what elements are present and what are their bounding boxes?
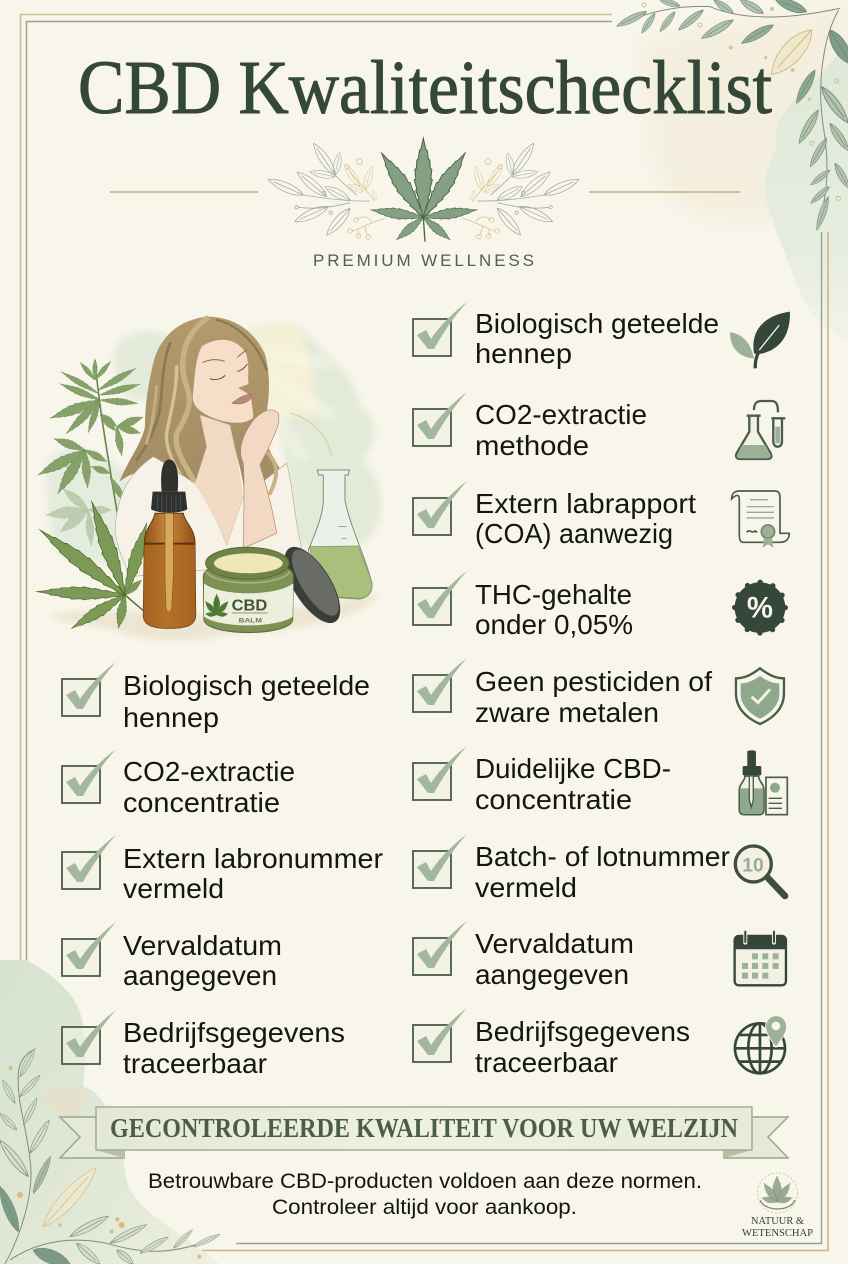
item: Geen pesticiden of zware metalen: Geen pesticiden of: [475, 666, 712, 697]
item: Biologisch geteelde hennep: Biologisch geteelde: [475, 308, 719, 339]
icon: percent badge: [735, 582, 785, 633]
cannabis plant: [35, 358, 145, 547]
item: Vervaldatum aangegeven: [413, 921, 634, 990]
item: Geen pesticiden of zware metalen: zware metalen: [475, 697, 659, 728]
blouse: [115, 457, 302, 577]
item: Extern labrapport (COA) aanwezig: [413, 481, 696, 549]
item: Vervaldatum aangegeven: [62, 922, 282, 991]
item: THC-gehalte onder 0,05%: THC-gehalte: [475, 579, 632, 610]
woman's hair, back: [119, 317, 282, 513]
icon: sprout: [730, 312, 790, 368]
item: THC-gehalte onder 0,05%: [413, 571, 633, 640]
item: Duidelijke CBD-concentratie: [413, 746, 671, 815]
item: CO2-extractie methode: methode: [475, 430, 589, 461]
amber dropper bottle: [143, 459, 196, 628]
icon: calendar: [735, 932, 786, 985]
item: Extern labrapport (COA) aanwezig: (COA) aanwezig: [475, 518, 673, 549]
item: Batch- of lotnummer vermeld: vermeld: [475, 872, 577, 903]
item: Biologisch geteelde hennep: hennep: [475, 338, 572, 369]
watercolor background: [47, 322, 381, 641]
checklist: left column: [62, 662, 383, 1079]
item: Batch- of lotnummer vermeld: [413, 834, 730, 903]
ornament: divider right: [589, 191, 740, 193]
ribbon banner: GECONTROLEERDE KWALITEIT VOOR UW WELZIJN: [110, 1113, 738, 1143]
item: Bedrijfsgegevens traceerbaar: [413, 1008, 690, 1078]
brand logo: Natuur & Wetenschap: WETENSCHAP: [742, 1228, 813, 1239]
CBD balm jar: CBD: [232, 598, 267, 615]
item: THC-gehalte onder 0,05%: onder 0,05%: [475, 609, 633, 640]
watercolor wash: top right: [640, 0, 848, 340]
item: Bedrijfsgegevens traceerbaar: Bedrijfsgegevens: [123, 1017, 345, 1048]
item: Duidelijke CBD-concentratie: Duidelijke CBD-: [475, 753, 671, 784]
ribbon banner: [60, 1107, 788, 1158]
CBD balm jar: [203, 547, 293, 632]
closing note: [148, 1170, 702, 1219]
arm and hand: [241, 410, 279, 548]
corner botanical: top right: [615, 0, 848, 231]
icon: dropper bottle and label card: [739, 750, 787, 815]
item: Vervaldatum aangegeven: aangegeven: [123, 960, 277, 991]
item: Biologisch geteelde hennep: hennep: [123, 702, 219, 733]
item: CO2-extractie concentratie: CO2-extractie: [123, 756, 295, 787]
item: Vervaldatum aangegeven: Vervaldatum: [123, 930, 282, 961]
neck and chest: [195, 415, 243, 545]
ornament: divider left: [110, 191, 258, 193]
title: CBD Kwaliteitschecklist: [78, 46, 772, 130]
left sprig: [266, 141, 385, 239]
item: Bedrijfsgegevens traceerbaar: traceerbaar: [123, 1048, 267, 1079]
item: CO2-extractie concentratie: concentratie: [123, 787, 280, 818]
icon: lab certificate scroll: [732, 491, 789, 548]
face: [193, 340, 253, 423]
glass flask: [308, 470, 372, 599]
item: CO2-extractie concentratie: [62, 749, 295, 818]
item: Vervaldatum aangegeven: Vervaldatum: [475, 928, 634, 959]
checklist: right column: [413, 302, 730, 1078]
item: Extern labronummer vermeld: [62, 835, 383, 904]
corner botanical: bottom left: [0, 1047, 221, 1264]
item: Bedrijfsgegevens traceerbaar: Bedrijfsgegevens: [475, 1016, 690, 1047]
icon: magnifier with batch number: [735, 846, 785, 896]
brand logo: Natuur & Wetenschap: [742, 1173, 813, 1239]
icon: globe with location pin: [735, 1016, 787, 1073]
item: Biologisch geteelde hennep: Biologisch geteelde: [123, 670, 370, 701]
brand logo: Natuur & Wetenschap: NATUUR &: [751, 1216, 804, 1227]
item: CO2-extractie methode: CO2-extractie: [475, 399, 647, 430]
item: Extern labronummer vermeld: vermeld: [123, 873, 224, 904]
jar lid: [274, 538, 351, 632]
closing note: Controleer altijd voor aankoop.: [272, 1196, 577, 1219]
right sprig: [462, 141, 581, 239]
icon: lab flask and test tube: [736, 401, 785, 459]
item: CO2-extractie methode: [413, 392, 647, 461]
item: Batch- of lotnummer vermeld: Batch- of lotnummer: [475, 841, 730, 872]
closing note: Betrouwbare CBD-producten voldoen aan deze normen.: [148, 1170, 702, 1193]
item: Biologisch geteelde hennep: [62, 662, 370, 733]
CBD balm jar: BALM: [239, 618, 263, 625]
facial features: [203, 351, 252, 404]
icon: shield with check: [736, 668, 784, 724]
item: Extern labrapport (COA) aanwezig: Extern labrapport: [475, 488, 696, 519]
item: Duidelijke CBD-concentratie: concentratie: [475, 784, 632, 815]
item: Bedrijfsgegevens traceerbaar: [62, 1010, 345, 1079]
central cannabis leaf: [370, 138, 478, 243]
watercolor wash: bottom left: [0, 960, 220, 1264]
subtitle: PREMIUM WELLNESS: [313, 251, 534, 270]
large cannabis leaf: [35, 499, 153, 633]
item: Bedrijfsgegevens traceerbaar: traceerbaar: [475, 1047, 618, 1078]
icon: percent badge: %: [747, 592, 773, 625]
item: Biologisch geteelde hennep: [413, 302, 719, 369]
item: Extern labronummer vermeld: Extern labronummer: [123, 843, 383, 874]
hair front strands: [137, 318, 276, 493]
logo: cannabis leaf with botanical sprigs: [266, 138, 581, 243]
hero illustration: woman with CBD products: [35, 317, 381, 641]
item: Geen pesticiden of zware metalen: [413, 658, 712, 728]
item: Vervaldatum aangegeven: aangegeven: [475, 959, 629, 990]
icon: magnifier with batch number: 10: [742, 855, 764, 876]
